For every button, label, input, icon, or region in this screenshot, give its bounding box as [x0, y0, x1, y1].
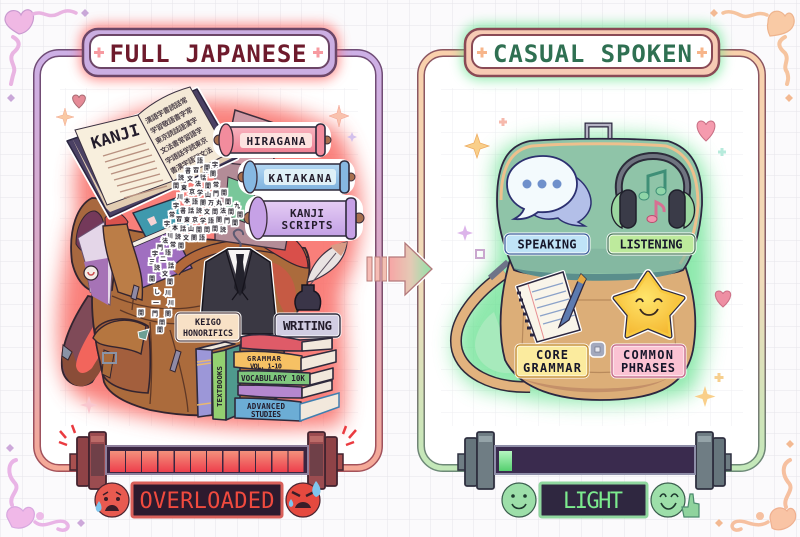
red flap right: [262, 228, 308, 268]
title text: FULL JAPANESE: [110, 40, 306, 68]
falling kanji tiles: 問: [204, 225, 210, 234]
page characters: 学習敬語書字常: [149, 105, 195, 137]
falling kanji tiles: 字: [212, 160, 218, 169]
falling kanji tiles: 語: [199, 233, 205, 242]
falling kanji tiles: 開: [204, 163, 210, 172]
falling kanji tiles: 聞: [167, 277, 173, 286]
worried face: [95, 483, 129, 517]
falling kanji tiles: 文: [187, 174, 193, 183]
icon: speech bubbles: [507, 156, 591, 226]
panel: full Japanese: [37, 53, 379, 468]
status text: LIGHT: [563, 489, 623, 514]
badge: [84, 266, 98, 280]
falling kanji tiles: 山: [205, 190, 211, 199]
label: core grammar: [516, 345, 588, 377]
folders behind scrolls: [215, 110, 300, 250]
icon: smiling star: [615, 273, 683, 336]
scroll label: SCRIPTS: [282, 219, 332, 232]
bar segments: [110, 451, 304, 472]
book stack: STUDIES: [251, 410, 281, 419]
bag body: [92, 220, 309, 415]
text lines: [103, 143, 167, 198]
sparkle marks: [477, 48, 707, 58]
handle: [587, 125, 610, 140]
book heading: KANJI: [89, 120, 142, 153]
falling kanji tiles: 間: [228, 207, 234, 216]
tie: [234, 254, 246, 296]
falling kanji tiles: 関: [200, 198, 206, 207]
label: common phrases: [612, 345, 685, 377]
falling kanji tiles: 学: [200, 216, 206, 225]
falling kanji tiles: 関: [216, 215, 222, 224]
falling kanji tiles: 語: [165, 248, 171, 257]
falling kanji tiles: 語: [192, 197, 198, 206]
scroll label: KATAKANA: [268, 172, 332, 185]
pen: [559, 274, 586, 327]
falling kanji tiles: 読: [220, 225, 226, 234]
scroll label: KANJI: [290, 207, 324, 220]
falling kanji tiles: 万: [208, 198, 214, 207]
label: writing: [275, 314, 340, 337]
falling kanji tiles: 学: [197, 188, 203, 197]
label: core grammar: GRAMMAR: [523, 361, 582, 375]
track: [106, 446, 308, 474]
book stack: VOCABULARY 10K: [241, 374, 305, 383]
falling kanji tiles: 門: [213, 189, 219, 198]
falling kanji tiles: 問: [212, 207, 218, 216]
flap: [497, 139, 702, 278]
falling kanji tiles: 法: [162, 236, 168, 245]
lapels: [226, 251, 252, 300]
dumbbell weights: [70, 454, 78, 470]
falling kanji tiles: 門: [157, 243, 163, 252]
upper left lobe: [71, 198, 118, 293]
falling kanji tiles: 丸: [216, 198, 222, 207]
green flap peek: [138, 329, 149, 340]
falling kanji tiles: 京: [192, 215, 198, 224]
cloth: [78, 222, 112, 305]
black suit on hanger: [200, 230, 277, 334]
label: keigo honorifics: KEIGO: [195, 318, 221, 328]
label: speaking: [505, 234, 589, 254]
strap buckle: [62, 345, 72, 360]
falling kanji tiles: 常: [213, 180, 219, 189]
falling kanji tiles: 字: [173, 201, 179, 210]
green book: vocabulary: [238, 371, 310, 385]
dumbbell weights: [458, 454, 466, 470]
sparkle marks: [94, 48, 323, 58]
falling kanji tiles: 東: [184, 215, 190, 224]
scroll end: [249, 197, 267, 239]
falling kanji tiles: 開: [138, 308, 144, 317]
label: core grammar: CORE: [536, 348, 568, 362]
corner ornament: top right: [710, 9, 794, 102]
label: common phrases: COMMON: [623, 348, 673, 362]
falling kanji tiles: 本: [184, 196, 190, 205]
falling kanji tiles: 法: [195, 179, 201, 188]
falling kanji tiles: 文: [204, 207, 210, 216]
strap: [456, 273, 530, 387]
status: light: [502, 483, 699, 517]
front pocket: [95, 319, 150, 393]
falling kanji tiles: 川: [165, 288, 171, 297]
page block: [72, 138, 232, 212]
alert ticks: [59, 425, 356, 445]
falling kanji tiles: 開: [178, 241, 184, 250]
pocket strap and buckle: [102, 350, 114, 378]
falling kanji tiles: 話: [168, 261, 174, 270]
page characters: [144, 95, 215, 177]
falling kanji tiles: 文: [162, 269, 168, 278]
falling kanji tiles: 読: [154, 263, 160, 272]
label: keigo honorifics: [176, 313, 240, 341]
scroll label: HIRAGANA: [246, 135, 306, 148]
falling kanji tiles: 読: [196, 206, 202, 215]
scroll end: [243, 161, 257, 193]
falling kanji tiles: 川: [168, 298, 174, 307]
bag opening rim: [175, 245, 306, 272]
ink and quill: [295, 242, 347, 310]
teal book: [133, 198, 192, 245]
falling kanji tiles: 間: [159, 318, 165, 327]
label: keigo honorifics: HONORIFICS: [183, 329, 233, 339]
ink bottle: [295, 285, 321, 310]
corner ornament: top left: [5, 9, 89, 102]
shoulder bag illustration: [456, 125, 702, 400]
label: listening: [608, 234, 695, 254]
open kanji book: [67, 87, 237, 217]
page characters: 書漢字語習文法: [169, 145, 215, 177]
falling kanji tiles: 二: [160, 254, 166, 263]
clasp: [590, 342, 605, 357]
blue book: advanced studies: [235, 398, 301, 421]
falling kanji tiles: 開: [149, 274, 155, 283]
zipper pulls: [131, 285, 181, 372]
shirt: [228, 250, 250, 288]
left strap: [62, 296, 108, 386]
falling kanji tiles: 字: [164, 219, 170, 228]
falling kanji tiles: 聞: [232, 218, 238, 227]
track: [495, 446, 695, 474]
standing green book: textbooks: [225, 345, 240, 420]
book stack: VOL. 1-10: [250, 362, 282, 370]
book stack: TEXTBOOKS: [216, 366, 224, 407]
falling kanji tiles: 関: [191, 233, 197, 242]
falling kanji tiles: 門: [224, 216, 230, 225]
falling kanji tiles: 常: [169, 210, 175, 219]
falling kanji tiles: 書: [180, 206, 186, 215]
red overload glow: [58, 101, 361, 429]
label: writing: WRITING: [283, 318, 332, 333]
falling kanji tiles: [138, 156, 243, 334]
falling kanji tiles: 京: [189, 187, 195, 196]
falling kanji tiles: 字: [152, 249, 158, 258]
status: overloaded: [95, 481, 320, 517]
plum interior: [76, 211, 104, 252]
right sparkles and hearts: [457, 118, 731, 407]
falling kanji tiles: 九: [234, 201, 240, 210]
title text: CASUAL SPOKEN: [493, 40, 692, 68]
falling kanji tiles: 間: [212, 224, 218, 233]
green light glow: [454, 135, 710, 403]
panel: casual spoken: [421, 53, 762, 468]
clip: [490, 262, 508, 278]
falling kanji tiles: 読: [178, 173, 184, 182]
falling kanji tiles: 話: [200, 173, 206, 182]
falling kanji tiles: 聞: [157, 325, 163, 334]
purple book: [123, 228, 192, 288]
scroll: kanji scripts: [244, 195, 364, 241]
transition arrow: [367, 243, 432, 295]
falling kanji tiles: 聞: [225, 197, 231, 206]
falling kanji tiles: 語: [208, 216, 214, 225]
falling kanji tiles: 川: [167, 231, 173, 240]
body seams: [112, 292, 200, 412]
page characters: 字語話学読東京: [164, 135, 210, 167]
title banner: casual spoken: [462, 24, 722, 80]
falling kanji tiles: 話: [180, 224, 186, 233]
book stack: [196, 335, 339, 421]
overload meter: [59, 425, 356, 489]
status text: OVERLOADED: [140, 489, 274, 514]
falling kanji tiles: 東: [181, 183, 187, 192]
falling kanji tiles: 文: [183, 233, 189, 242]
left page: [75, 115, 173, 205]
falling kanji tiles: 聞: [205, 181, 211, 190]
standing purple book: [196, 345, 212, 417]
falling kanji tiles: 法: [220, 206, 226, 215]
falling kanji tiles: 川: [177, 192, 183, 201]
smiling face: [502, 483, 536, 517]
purple book: [238, 385, 302, 398]
falling kanji tiles: 習: [176, 214, 182, 223]
label: listening: LISTENING: [620, 238, 682, 252]
falling kanji tiles: 開: [196, 225, 202, 234]
yellow book: grammar: [234, 351, 302, 371]
scroll: hiragana: [213, 122, 331, 158]
falling kanji tiles: 話: [188, 206, 194, 215]
scroll: katakana: [238, 159, 355, 195]
page characters: 漢語字書読話常: [144, 95, 190, 127]
label: common phrases: PHRASES: [621, 361, 675, 375]
pocket: [522, 300, 676, 372]
scroll end: [219, 124, 233, 156]
red book: [241, 335, 332, 351]
icon: headphones: [612, 156, 694, 228]
corner ornament: bottom left: [6, 444, 85, 530]
falling kanji tiles: 関: [165, 309, 171, 318]
backpack illustration: [62, 198, 309, 415]
quill: [307, 242, 347, 282]
happy face with thumb: [651, 483, 699, 517]
falling kanji tiles: 本: [172, 223, 178, 232]
shoulder strap: [103, 224, 142, 300]
icon: notebook and pen: [517, 272, 586, 342]
falling kanji tiles: 開: [221, 188, 227, 197]
falling kanji tiles: 読: [175, 232, 181, 241]
falling kanji tiles: 常: [170, 240, 176, 249]
left sparkles and heart: [56, 95, 357, 414]
falling kanji tiles: 三: [149, 257, 155, 266]
right page: [138, 87, 228, 181]
label: speaking: SPEAKING: [518, 238, 576, 252]
bag body: [501, 250, 695, 400]
falling kanji tiles: し: [154, 287, 160, 296]
falling kanji tiles: 門: [152, 309, 158, 318]
falling kanji tiles: 関: [210, 169, 216, 178]
falling kanji tiles: 習: [193, 165, 199, 174]
music notes: [648, 171, 665, 196]
light meter: [458, 432, 731, 489]
falling kanji tiles: 開: [237, 210, 243, 219]
red patch: [105, 212, 128, 240]
falling kanji tiles: 書: [185, 166, 191, 175]
page characters: 東京読話語漢字: [154, 115, 200, 147]
angry face: [286, 481, 320, 517]
falling kanji tiles: 山: [188, 224, 194, 233]
book stack: ADVANCED: [247, 402, 285, 411]
page characters: 文法書常習語字: [159, 125, 205, 157]
corner ornament: bottom right: [715, 440, 796, 530]
falling kanji tiles: 間: [173, 181, 179, 190]
falling kanji tiles: 一: [153, 298, 159, 307]
bar fill: [499, 451, 512, 471]
falling kanji tiles: 語: [197, 156, 203, 165]
title banner: full Japanese: [80, 24, 339, 80]
book stack: GRAMMAR: [247, 355, 282, 363]
